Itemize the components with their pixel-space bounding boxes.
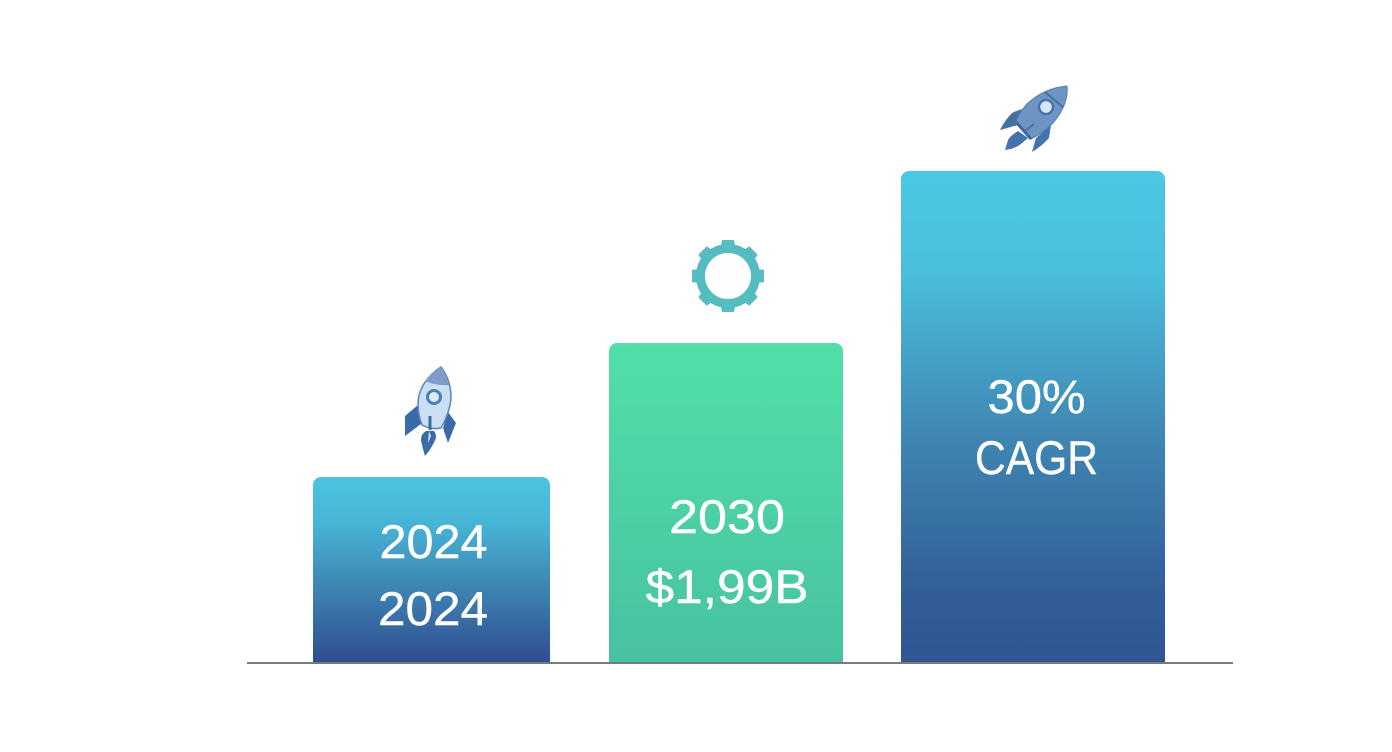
baseline axis (247, 662, 1233, 664)
bar label: 30% CAGR: CAGR (975, 431, 1098, 484)
bar label: 2030 $1,99B: 2030 (669, 490, 785, 543)
bar label: 2024 2024: 2024 (380, 515, 488, 568)
bar label: 2030 $1,99B: $1,99B (646, 560, 808, 613)
bar: CAGR (901, 171, 1165, 663)
bar label: 2030 $1,99B (646, 490, 808, 613)
bar label: 30% CAGR (975, 370, 1098, 484)
bar: 2030 (609, 343, 843, 663)
bar label: 2024 2024 (378, 515, 488, 635)
bar label: 2024 2024: 2024 (378, 582, 488, 635)
icon: rocket right (1000, 86, 1067, 152)
bar: 2024 (313, 477, 550, 663)
icon: rocket left (405, 367, 456, 456)
bar label: 30% CAGR: 30% (988, 370, 1086, 423)
icon: gear (692, 240, 764, 312)
